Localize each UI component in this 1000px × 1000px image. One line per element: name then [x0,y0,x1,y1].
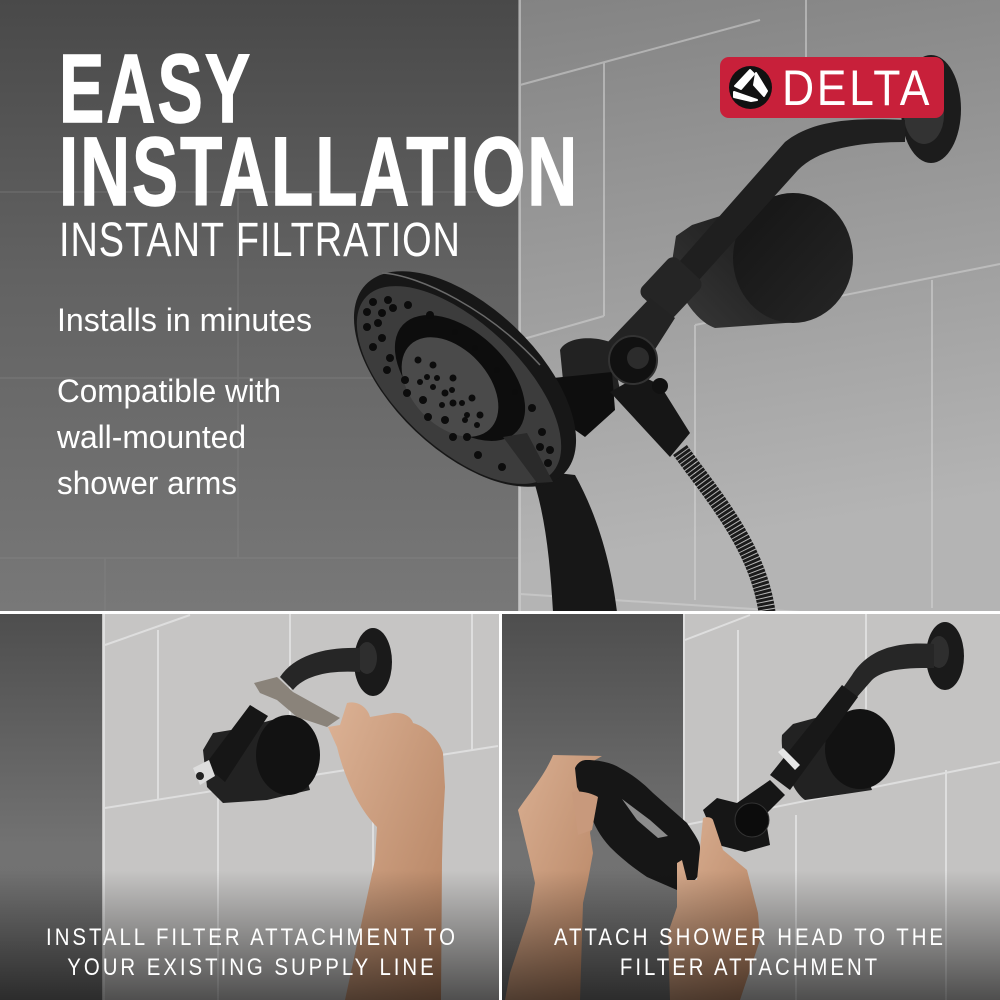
dividers [0,612,1000,1000]
title: Easy Installation: EASY [59,34,252,143]
icon: shower arm [672,119,905,290]
icon: left thumb [572,791,598,835]
title: Easy Installation [59,34,579,226]
icon: filter attachment [193,705,320,803]
text block: compatibility: Compatible with [57,373,281,409]
icon: swivel mount [703,748,800,852]
caption: step 2: ATTACH SHOWER HEAD TO THE [554,923,946,950]
caption: step 1: YOUR EXISTING SUPPLY LINE [67,953,437,980]
icon: swivel mount [553,298,690,457]
logo: Delta [720,57,944,118]
text block: compatibility [56,373,281,501]
icon: right hand [668,817,760,1000]
icon: shower head held in hands [575,760,700,890]
icon: delta emblem [729,66,772,109]
icon: shower handle [530,470,617,612]
title: Easy Installation: INSTALLATION [59,117,579,226]
icon: shower head [316,232,614,526]
panel: step 2 photo [502,614,1000,1000]
text block: installs in minutes: Installs in minutes [57,302,312,338]
icon: flange and arm [280,628,392,696]
text block: compatibility: wall-mounted [56,419,246,455]
shower nozzles [363,296,554,471]
text block: compatibility: shower arms [57,465,237,501]
caption: step 2: FILTER ATTACHMENT [620,953,880,980]
icon: filter attachment [770,685,895,800]
subtitle: INSTANT FILTRATION [59,214,461,267]
icon: wall flange [901,55,961,163]
caption: step 1: INSTALL FILTER ATTACHMENT TO [46,923,458,950]
icon: hose [680,450,767,612]
caption: step 1 [46,923,458,980]
panel: step 1 photo [0,614,500,1000]
icon: hand and arm [328,702,445,1000]
icon: left hand [505,755,602,1000]
icon: wrench [254,677,340,727]
icon: filter attachment [672,193,853,328]
icon: flange and arm [838,622,964,705]
logo: Delta: DELTA [782,61,932,117]
caption: step 2 [554,923,946,980]
panel: main shower photo [0,0,1000,612]
icon: arm collar [637,254,705,322]
